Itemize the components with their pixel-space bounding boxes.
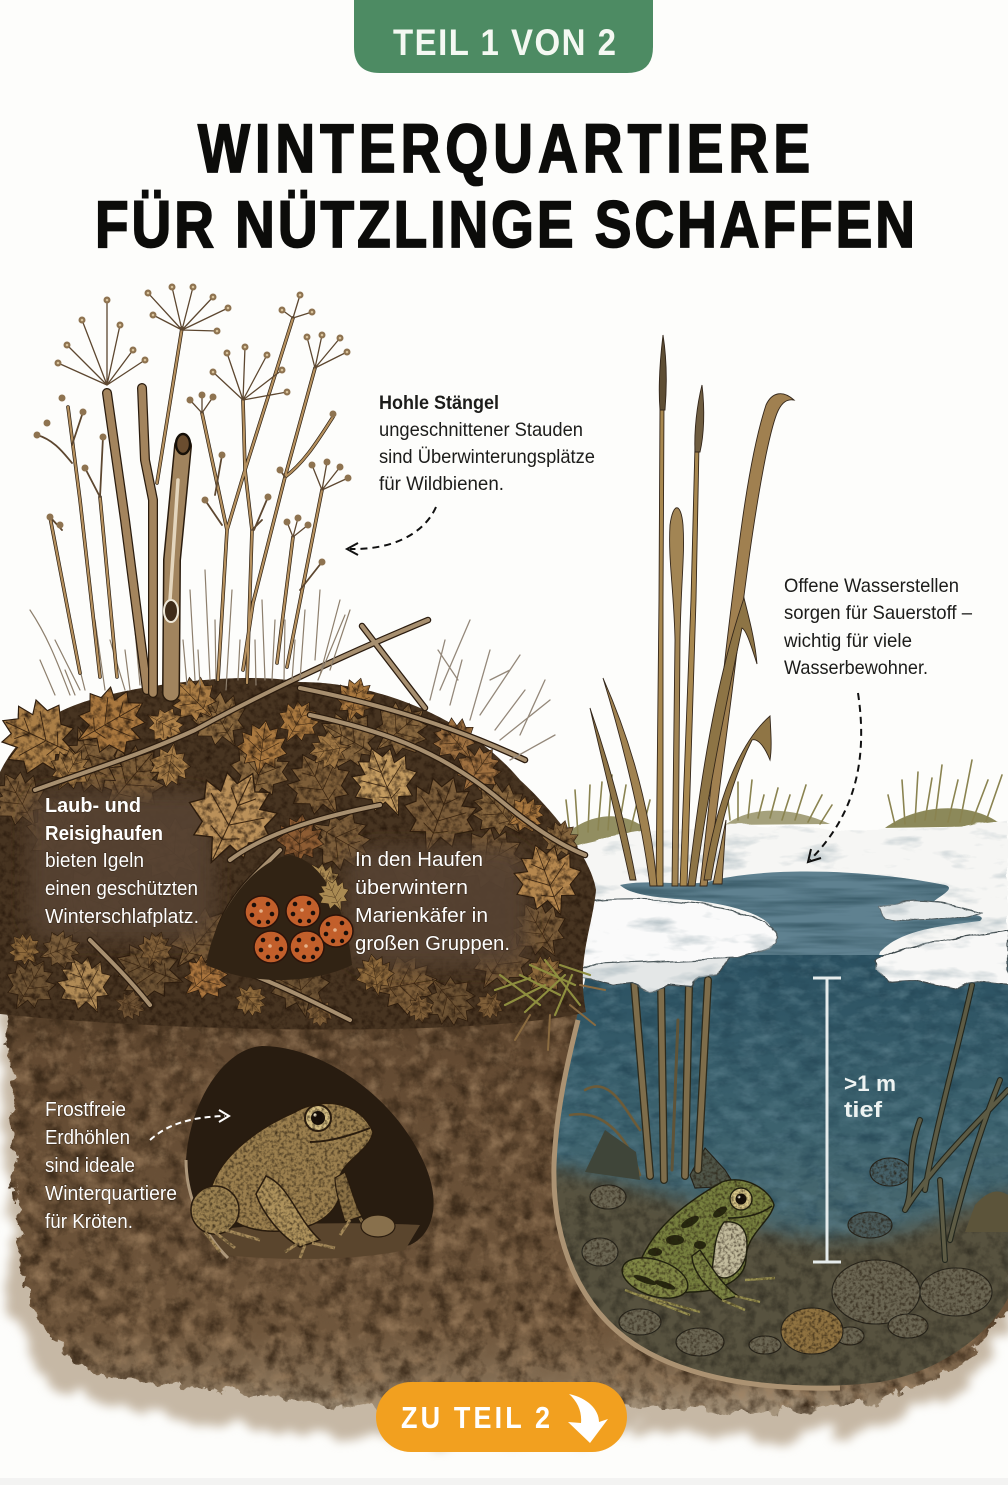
base grass — [30, 570, 350, 695]
leaves front layer — [0, 666, 593, 1027]
dried perennial stems — [30, 287, 350, 695]
ice front face left — [572, 950, 735, 992]
moss clump — [495, 960, 605, 1050]
open water surface — [620, 872, 982, 968]
thick hollow stems — [107, 393, 147, 690]
annotation: open water: sorgen für Sauerstoff – — [784, 602, 972, 624]
ladybugs group — [245, 895, 353, 963]
snow and ice surface, background — [555, 820, 1008, 980]
annotation: ladybirds: In den Haufen — [355, 849, 483, 871]
annotation: leaf pile: einen geschützten — [45, 878, 198, 900]
annotation: open water: Wasserbewohner. — [784, 657, 928, 679]
annotation: ladybirds: überwintern — [355, 877, 468, 899]
ice slab left — [567, 899, 777, 965]
stem openings — [176, 434, 190, 454]
distant grass on the pond bank — [555, 760, 1003, 850]
depth label: tief — [844, 1097, 883, 1122]
annotation: open water: Offene Wasserstellen — [784, 575, 959, 597]
thin stems outline — [50, 318, 333, 683]
ice slabs in front — [567, 899, 1008, 992]
seed heads — [37, 287, 348, 562]
underwater reed stems — [570, 980, 1008, 1260]
pile base — [0, 678, 596, 1030]
scrim behind pile labels — [28, 792, 527, 967]
frog — [617, 1180, 775, 1315]
depth label — [844, 1071, 896, 1122]
pebbles and rocks — [582, 1148, 992, 1356]
toad — [191, 1103, 373, 1258]
annotation: earth holes: Erdhöhlen — [45, 1127, 130, 1149]
leaf and twig pile — [0, 620, 605, 1050]
annotation: open water — [783, 575, 972, 679]
leaves back layer — [0, 680, 583, 1037]
water body — [550, 950, 1008, 1270]
icon: curved arrow — [568, 1394, 608, 1443]
ladybug cavity — [206, 855, 352, 980]
annotation: hollow stems — [379, 392, 595, 495]
annotation: leaf pile: bieten Igeln — [45, 850, 144, 872]
header tab — [354, 0, 653, 73]
depth label: >1 m — [844, 1071, 896, 1096]
annotation: earth holes — [45, 1099, 177, 1233]
title — [95, 111, 915, 261]
umbel rays — [50, 287, 348, 537]
annotation: hollow stems: Hohle Stängel — [379, 392, 499, 414]
pond rim — [554, 1020, 840, 1388]
annotation: earth holes: für Kröten. — [45, 1211, 133, 1233]
sunken leaves — [585, 1130, 640, 1180]
button: next part — [376, 1382, 627, 1452]
annotation: earth holes: sind ideale — [45, 1155, 135, 1177]
arrow: to hollow stems — [347, 507, 436, 555]
title: WINTERQUARTIERE — [198, 111, 810, 187]
annotation: ladybirds — [355, 849, 510, 955]
soil wash fringe — [2, 1010, 1008, 1441]
soil cross-section — [10, 1000, 1008, 1411]
ice channel right — [880, 901, 980, 921]
annotation: open water: wichtig für viele — [783, 630, 912, 652]
annotation: ladybirds: Marienkäfer in — [355, 905, 488, 927]
stone in burrow — [361, 1215, 395, 1237]
annotation: leaf pile: Winterschlafplatz. — [45, 906, 199, 928]
pond floor — [540, 1165, 1008, 1405]
annotation: leaf pile: Laub- und — [45, 795, 141, 817]
button: next part: ZU TEIL 2 — [401, 1402, 550, 1435]
burrow cavity — [186, 1046, 434, 1255]
annotation: leaf pile: Reisighaufen — [45, 823, 163, 845]
depth marker — [813, 978, 841, 1262]
annotation: earth holes: Frostfreie — [45, 1099, 126, 1121]
arrow: to toad burrow — [150, 1110, 229, 1140]
annotation: ladybirds: großen Gruppen. — [355, 933, 510, 955]
ice slab right — [875, 930, 1008, 988]
annotation: hollow stems: für Wildbienen. — [379, 473, 504, 495]
annotation: hollow stems: sind Überwinterungsplätze — [379, 446, 595, 468]
panel: pond underwater — [540, 950, 1008, 1405]
fine bare twigs — [430, 620, 555, 760]
burrow with toad — [186, 1046, 434, 1259]
reed cluster — [590, 335, 794, 886]
annotation: earth holes: Winterquartiere — [45, 1183, 177, 1205]
arrow: to open water — [808, 693, 861, 862]
title: FÜR NÜTZLINGE SCHAFFEN — [95, 187, 915, 261]
annotation: hollow stems: ungeschnittener Stauden — [379, 419, 583, 441]
annotation: leaf pile — [45, 795, 199, 928]
header tab: TEIL 1 VON 2 — [393, 22, 616, 63]
twigs — [35, 620, 585, 1020]
